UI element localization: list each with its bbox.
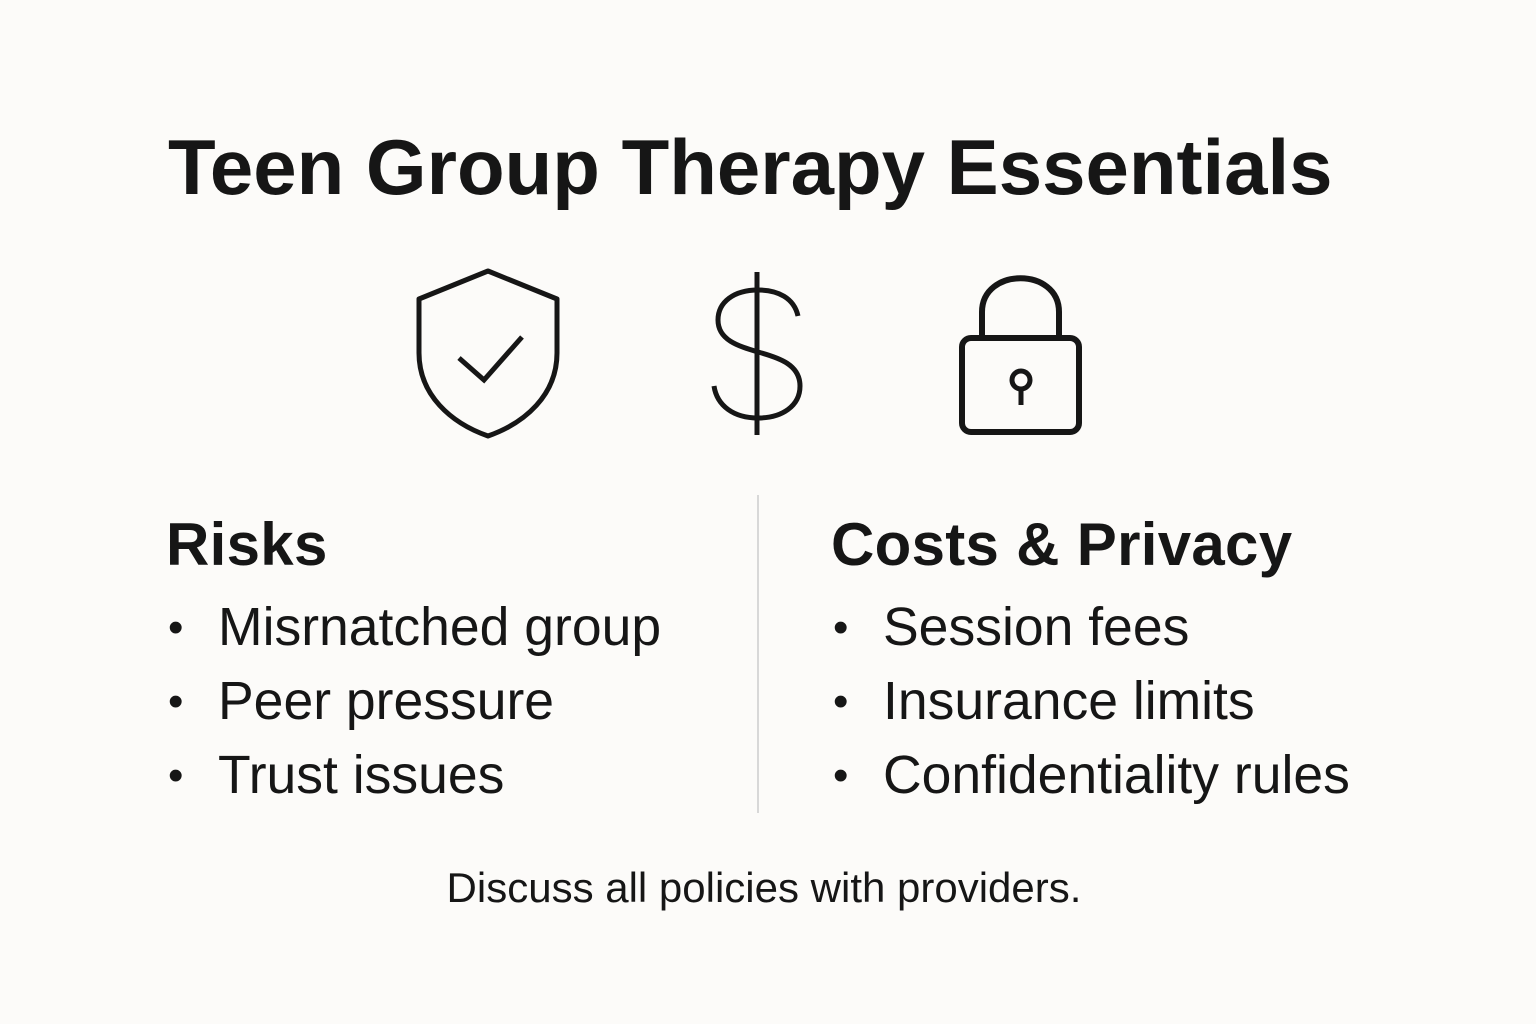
list: risks: Peer pressure (218, 672, 554, 731)
panel: costs & privacy (831, 511, 1350, 805)
heading: costs & privacy: Costs & Privacy (831, 511, 1292, 578)
list: costs: Confidentiality rules (883, 746, 1350, 805)
list: costs: Insurance limits (883, 672, 1255, 731)
footer note: Discuss all policies with providers. (447, 864, 1081, 911)
list: risks: • (168, 677, 183, 726)
list: risks: Misrnatched group (218, 598, 661, 657)
list: costs: • (833, 751, 848, 800)
list: costs: Session fees (883, 598, 1189, 657)
icon: shield (416, 268, 560, 438)
icon: lock (959, 275, 1082, 435)
icon: dollar (712, 272, 802, 435)
list: risks: • (168, 751, 183, 800)
list: risks (168, 598, 661, 805)
list: risks: • (168, 603, 183, 652)
title: Teen Group Therapy Essentials (168, 123, 1333, 211)
panel: risks (166, 511, 661, 805)
list: costs: • (833, 603, 848, 652)
list: risks: Trust issues (218, 746, 504, 805)
heading: risks: Risks (166, 511, 328, 578)
list: costs: • (833, 677, 848, 726)
list: costs (833, 598, 1350, 805)
divider (757, 495, 759, 813)
